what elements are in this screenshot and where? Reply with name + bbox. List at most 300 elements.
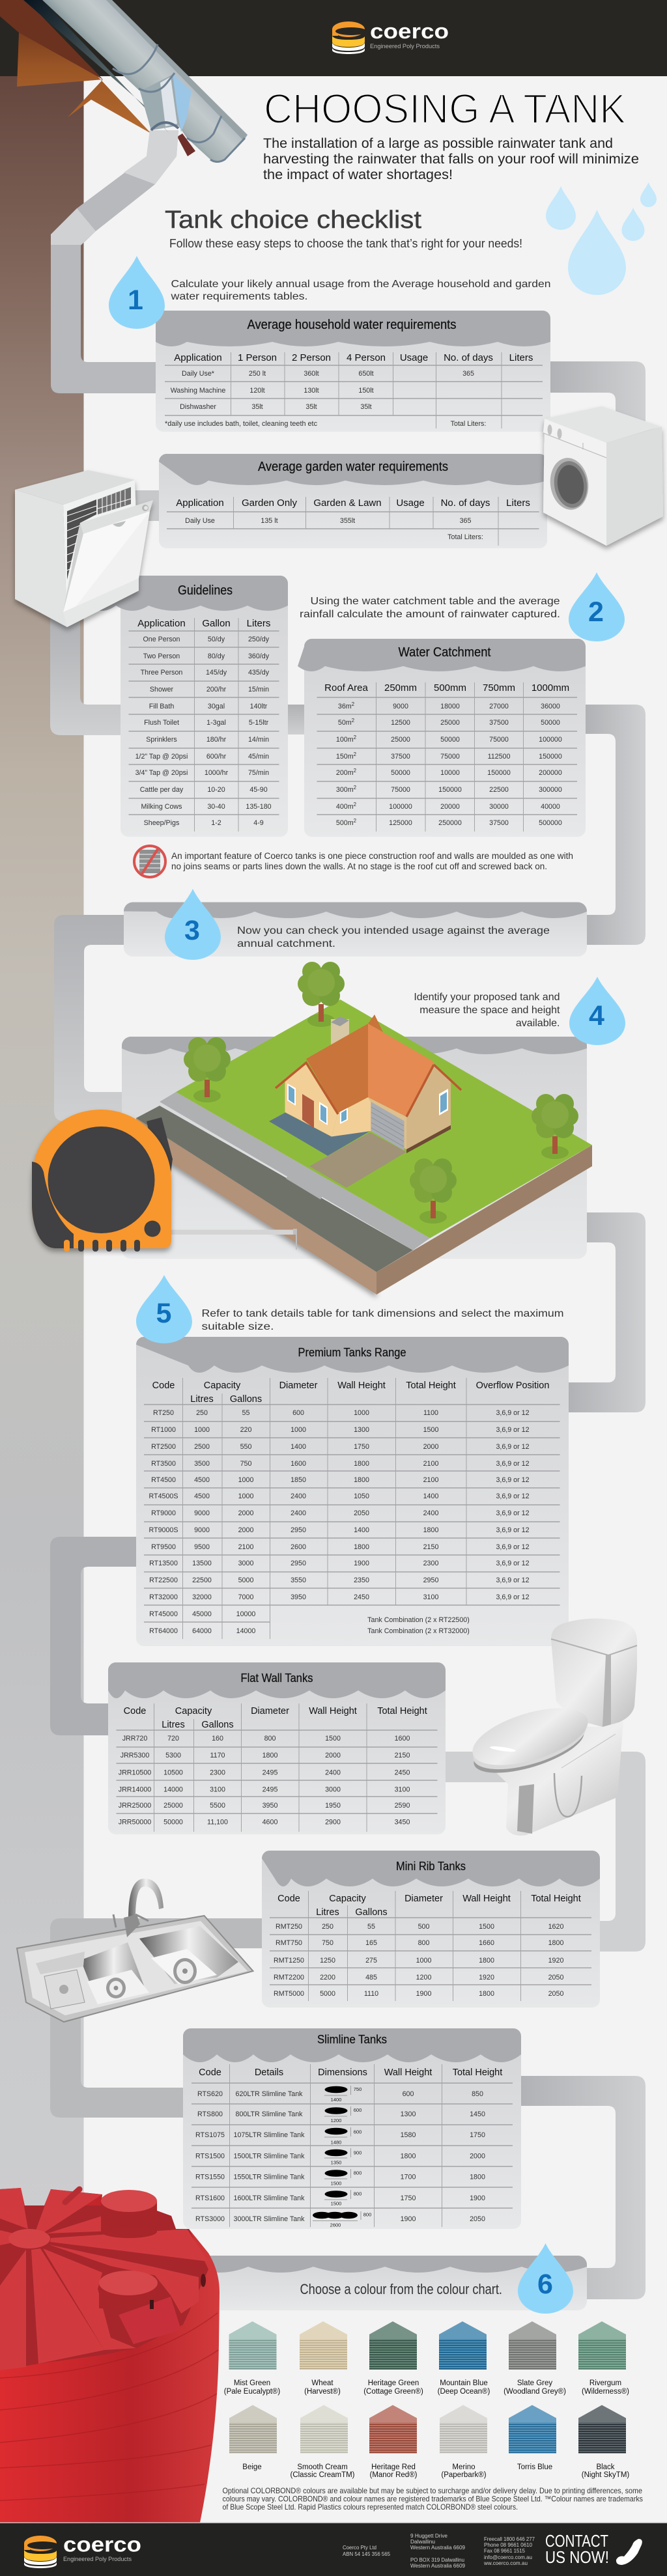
table: premium tanks range: 1000 xyxy=(194,1426,210,1434)
slimline tank footprint diagrams: 1350 xyxy=(331,2159,341,2166)
table: slimline tanks: 850 xyxy=(472,2090,483,2098)
table: average garden water requirements: Garden & Lawn xyxy=(313,497,382,509)
table: premium tanks range: 2350 xyxy=(354,1576,369,1584)
table: premium tanks range: 2450 xyxy=(354,1593,369,1601)
icon: kitchen sink xyxy=(17,1879,253,2022)
table: slimline tanks xyxy=(183,2028,521,2229)
colour chart swatches xyxy=(229,2321,626,2454)
table: guidelines: 140ltr xyxy=(250,703,268,710)
table: premium tanks range: RT9000 xyxy=(151,1509,176,1517)
table: flat wall tanks: 2150 xyxy=(395,1752,410,1759)
table: average garden water requirements xyxy=(159,454,547,548)
table: flat wall tanks: Code xyxy=(124,1706,146,1716)
table: water catchment: 2 xyxy=(352,718,355,723)
table: water catchment: 9000 xyxy=(393,703,408,710)
table: guidelines: 180/hr xyxy=(206,736,227,744)
table: premium tanks range: 3,6,9 or 12 xyxy=(496,1526,530,1534)
table: water catchment: 50m xyxy=(338,719,352,727)
table: guidelines: Sheep/Pigs xyxy=(144,819,179,827)
table: water catchment: 2 xyxy=(354,751,357,757)
table: average garden water requirements: Application xyxy=(176,497,224,509)
colour names: Mist Green xyxy=(234,2379,270,2387)
footer company details: Freecall 1800 646 277 xyxy=(484,2536,535,2542)
contact call to action xyxy=(545,2531,609,2567)
table: premium tanks range: 2100 xyxy=(423,1460,438,1468)
table: water catchment: 400m xyxy=(336,803,354,811)
contact call to action: US NOW! xyxy=(545,2547,609,2567)
table: average household water requirements: 35lt xyxy=(360,403,372,411)
table: flat wall tanks: JRR720 xyxy=(122,1735,147,1743)
table: water catchment: 100000 xyxy=(389,803,412,811)
table: water catchment: 25000 xyxy=(391,736,410,744)
table: guidelines: Two Person xyxy=(143,652,180,660)
table: premium tanks range: 2050 xyxy=(354,1509,369,1517)
panel: step 4 backdrop xyxy=(122,1037,587,1259)
table: water catchment: 37500 xyxy=(489,819,509,827)
table: flat wall tanks: 2900 xyxy=(325,1818,341,1826)
note: one piece construction: An important feature of Coerco tanks is one piece construction roof and walls are moulded as one with xyxy=(171,851,573,861)
table: premium tanks range: 2100 xyxy=(423,1476,438,1484)
table: guidelines: 1000/hr xyxy=(205,769,229,777)
table: premium tanks range: 3,6,9 or 12 xyxy=(496,1576,530,1584)
panel: step 3: 3 xyxy=(184,915,200,946)
step 4 text xyxy=(414,992,560,1029)
icon: washing machine xyxy=(543,406,663,546)
table: premium tanks range: RT64000 xyxy=(149,1627,178,1635)
table: guidelines: 250/dy xyxy=(248,636,270,643)
table: premium tanks range: 3500 xyxy=(194,1460,210,1468)
footer company details: 9 Huggett Drive xyxy=(410,2532,447,2539)
table: mini rib tanks: 500 xyxy=(418,1923,429,1931)
colour names: (Deep Ocean®) xyxy=(438,2388,490,2396)
table: water catchment: 2 xyxy=(354,735,357,740)
footer company details: Western Australia 6609 xyxy=(410,2562,465,2569)
checklist subheading: Follow these easy steps to choose the tank that’s right for your needs! xyxy=(169,237,522,250)
brick wall strip xyxy=(0,0,83,2576)
table: premium tanks range: 1000 xyxy=(238,1492,253,1500)
table: mini rib tanks: RMT750 xyxy=(276,1939,302,1947)
slimline tank footprint diagrams: 1500 xyxy=(331,2201,341,2206)
table: water catchment: 40000 xyxy=(541,803,560,811)
table: water catchment: 300000 xyxy=(539,786,562,794)
table: mini rib tanks: RMT2200 xyxy=(274,1974,304,1981)
table: water catchment: 10000 xyxy=(440,769,460,777)
table: premium tanks range: RT9000S xyxy=(149,1526,178,1534)
note: one piece construction xyxy=(171,851,573,871)
slimline tank footprint diagrams: 1200 xyxy=(331,2118,341,2123)
panel: step 6: Choose a colour from the colour chart. xyxy=(300,2281,502,2297)
table: guidelines: 30-40 xyxy=(207,803,225,811)
table: average garden water requirements: No. of days xyxy=(441,497,490,509)
step 2 text xyxy=(300,596,560,620)
table: premium tanks range: 1850 xyxy=(291,1476,306,1484)
table: mini rib tanks: 1500 xyxy=(479,1923,494,1931)
table: slimline tanks: RTS1600 xyxy=(195,2194,225,2202)
table: water catchment: 200m xyxy=(336,769,354,777)
table: premium tanks range: RT22500 xyxy=(149,1576,178,1584)
table: slimline tanks: RTS1550 xyxy=(195,2174,225,2181)
table: flat wall tanks: Capacity xyxy=(175,1706,212,1716)
table: slimline tanks: 1580 xyxy=(401,2131,416,2139)
table: premium tanks range: 3100 xyxy=(423,1593,438,1601)
table: mini rib tanks: Capacity xyxy=(329,1894,366,1904)
panel: step 3: Now you can check you intended usage against the average xyxy=(237,925,550,936)
icon: toilet xyxy=(466,1618,637,1836)
table: premium tanks range: 5000 xyxy=(238,1576,253,1584)
table: mini rib tanks: 2050 xyxy=(548,1974,563,1981)
table: mini rib tanks: RMT5000 xyxy=(274,1990,304,1998)
table: water catchment: 75000 xyxy=(440,753,460,761)
table: flat wall tanks: 25000 xyxy=(163,1802,183,1810)
table: mini rib tanks: 485 xyxy=(365,1974,377,1981)
table: water catchment: 300m xyxy=(336,786,354,794)
footer logo: Engineered Poly Products xyxy=(63,2556,132,2562)
table: slimline tanks: 1075LTR Slimline Tank xyxy=(234,2131,305,2139)
table: average household water requirements: 150lt xyxy=(358,387,374,395)
table: premium tanks range: 2400 xyxy=(291,1509,306,1517)
table: premium tanks range: 1800 xyxy=(354,1543,369,1551)
slimline tank footprint diagrams xyxy=(313,2086,371,2228)
step 4 text: Identify your proposed tank and xyxy=(414,992,560,1003)
table: guidelines: 15/min xyxy=(248,686,269,693)
table: mini rib tanks xyxy=(262,1851,600,2008)
colour names: Wheat xyxy=(311,2379,334,2387)
colour names: (Pale Eucalypt®) xyxy=(224,2388,280,2396)
table: flat wall tanks: 2495 xyxy=(263,1785,277,1793)
table: slimline tanks: Dimensions xyxy=(318,2067,367,2078)
table: average garden water requirements: Daily Use xyxy=(185,517,215,525)
table: guidelines: 1/2” Tap @ 20psi xyxy=(135,753,188,761)
intro paragraph: harvesting the rainwater that falls on your roof will minimize xyxy=(263,152,639,167)
illustration: red rainwater tank xyxy=(0,2188,220,2523)
table: premium tanks range: 4500 xyxy=(194,1492,210,1500)
step 5 text xyxy=(202,1308,564,1332)
table: flat wall tanks: 800 xyxy=(264,1735,276,1743)
table: water catchment: 150000 xyxy=(539,753,562,761)
table: flat wall tanks: 160 xyxy=(212,1735,223,1743)
colour disclaimer: of Blue Scope Steel Ltd. Rapid Plastics colours represented match COLORBOND® steel colours. xyxy=(223,2502,518,2512)
table: premium tanks range: 2500 xyxy=(194,1443,210,1451)
table: slimline tanks: Code xyxy=(199,2067,221,2078)
table: water catchment: 200000 xyxy=(539,769,562,777)
footer company details: ww.coerco.com.au xyxy=(483,2560,528,2566)
table: slimline tanks: 2000 xyxy=(470,2153,485,2161)
table: premium tanks range: 3,6,9 or 12 xyxy=(496,1460,530,1468)
panel: step 6: 6 xyxy=(537,2269,553,2300)
table: premium tanks range: 2950 xyxy=(291,1560,306,1567)
table: mini rib tanks: Mini Rib Tanks xyxy=(396,1860,466,1873)
table: mini rib tanks: Diameter xyxy=(404,1894,443,1904)
table: premium tanks range: 9000 xyxy=(194,1509,210,1517)
table: average garden water requirements: 355lt xyxy=(340,517,355,525)
tank inlet xyxy=(99,2271,206,2344)
table: flat wall tanks: Diameter xyxy=(251,1706,289,1716)
table: guidelines: 75/min xyxy=(248,769,269,777)
table: flat wall tanks: 720 xyxy=(167,1735,179,1743)
table: water catchment: 50000 xyxy=(391,769,410,777)
table: water catchment: 75000 xyxy=(489,736,509,744)
table: water catchment: Water Catchment xyxy=(399,645,491,660)
table: mini rib tanks: Total Height xyxy=(531,1894,581,1904)
table: premium tanks range: 55 xyxy=(242,1409,249,1417)
table: guidelines: 30gal xyxy=(208,703,225,710)
table: premium tanks range: 2100 xyxy=(238,1543,253,1551)
table: guidelines: Cattle per day xyxy=(140,786,184,794)
table: water catchment: 250000 xyxy=(438,819,462,827)
step 1 text xyxy=(170,279,551,302)
step 2 drop: 2 xyxy=(588,596,604,628)
footer company details: Phone 08 9661 0610 xyxy=(484,2541,532,2548)
table: premium tanks range: 3,6,9 or 12 xyxy=(496,1560,530,1567)
colour disclaimer xyxy=(223,2486,643,2512)
colour names: (Harvest®) xyxy=(304,2388,341,2396)
table: slimline tanks: RTS1075 xyxy=(195,2131,225,2139)
table: mini rib tanks: Gallons xyxy=(355,1907,388,1918)
table: premium tanks range: 2950 xyxy=(423,1576,438,1584)
table: premium tanks range: 7000 xyxy=(238,1593,253,1601)
table: guidelines: 45/min xyxy=(248,753,269,761)
table: mini rib tanks: 1620 xyxy=(548,1923,563,1931)
table: premium tanks range: 220 xyxy=(240,1426,251,1434)
table: guidelines: Guidelines xyxy=(178,583,233,598)
panel: step 3 xyxy=(124,889,587,960)
table: slimline tanks: RTS1500 xyxy=(195,2153,225,2161)
slimline tank footprint diagrams: 600 xyxy=(354,2129,362,2135)
table: premium tanks range: 3,6,9 or 12 xyxy=(496,1443,530,1451)
footer band xyxy=(0,2523,667,2576)
contact call to action: CONTACT xyxy=(545,2531,608,2551)
table: slimline tanks: 1900 xyxy=(470,2194,485,2202)
table: flat wall tanks: 3000 xyxy=(325,1785,341,1793)
table: water catchment: 1000mm xyxy=(532,682,569,693)
table: guidelines xyxy=(88,576,288,837)
table: mini rib tanks: 1900 xyxy=(416,1990,431,1998)
table: premium tanks range: 750 xyxy=(240,1460,251,1468)
table: premium tanks range: 13500 xyxy=(192,1560,212,1567)
step 1 text: Calculate your likely annual usage from the Average household and garden xyxy=(171,279,551,290)
table: flat wall tanks: Wall Height xyxy=(309,1706,357,1716)
table: premium tanks range: 1400 xyxy=(291,1443,306,1451)
table: premium tanks range: 2300 xyxy=(423,1560,438,1567)
table: mini rib tanks: 2200 xyxy=(320,1974,335,1981)
table: mini rib tanks: 165 xyxy=(365,1939,377,1947)
table: mini rib tanks: 2050 xyxy=(548,1990,563,1998)
footer logo: coerco xyxy=(63,2533,141,2556)
table: guidelines: 1-2 xyxy=(211,819,221,827)
table: flat wall tanks: 2495 xyxy=(263,1769,277,1776)
table: average household water requirements: 35lt xyxy=(305,403,317,411)
colour names: (Manor Red®) xyxy=(369,2471,418,2479)
colour names: Torris Blue xyxy=(517,2463,552,2471)
table: flat wall tanks: 3100 xyxy=(210,1785,225,1793)
table: flat wall tanks: Total Height xyxy=(377,1706,427,1716)
table: flat wall tanks: 5500 xyxy=(210,1802,225,1810)
table: slimline tanks: 800LTR Slimline Tank xyxy=(236,2110,303,2118)
table: premium tanks range: Tank Combination (2 x RT32000) xyxy=(367,1627,470,1635)
table: premium tanks range: 1300 xyxy=(354,1426,369,1434)
colour names: (Night SkyTM) xyxy=(582,2471,629,2479)
table: water catchment: 25000 xyxy=(440,719,460,727)
table: mini rib tanks: 800 xyxy=(418,1939,429,1947)
footer company details: ABN 54 145 356 565 xyxy=(343,2551,390,2557)
panel: step 6 xyxy=(189,2243,587,2314)
table: water catchment: 18000 xyxy=(440,703,460,710)
table: guidelines: Shower xyxy=(150,686,174,693)
table: guidelines: Application xyxy=(137,618,186,629)
step 2 drop xyxy=(569,572,625,641)
table: premium tanks range: 1000 xyxy=(238,1476,253,1484)
table: flat wall tanks: JRR5300 xyxy=(121,1752,149,1759)
table: average household water requirements: 120lt xyxy=(249,387,265,395)
table: water catchment: 750mm xyxy=(483,682,515,693)
step 4 drop: 4 xyxy=(589,1000,604,1031)
table: water catchment: 2 xyxy=(352,701,355,707)
table: water catchment: 500mm xyxy=(434,682,466,693)
table: guidelines: Flush Toilet xyxy=(144,719,179,727)
table: flat wall tanks: JRR25000 xyxy=(119,1802,151,1810)
colour names: Merino xyxy=(452,2463,475,2471)
colour names: (Cottage Green®) xyxy=(363,2388,423,2396)
table: premium tanks range: 3,6,9 or 12 xyxy=(496,1409,530,1417)
table: premium tanks range: 2000 xyxy=(238,1509,253,1517)
table: premium tanks range: 1900 xyxy=(354,1560,369,1567)
table: premium tanks range: 1800 xyxy=(354,1460,369,1468)
table: water catchment: 12500 xyxy=(391,719,410,727)
table: flat wall tanks: Gallons xyxy=(201,1720,234,1730)
table: premium tanks range: 2600 xyxy=(291,1543,306,1551)
table: flat wall tanks: 11,100 xyxy=(207,1818,228,1826)
table: premium tanks range: RT1000 xyxy=(151,1426,176,1434)
colour names: Smooth Cream xyxy=(297,2463,348,2471)
table: average garden water requirements: Usage xyxy=(396,497,425,509)
table: slimline tanks: Total Height xyxy=(453,2067,502,2078)
step 2 text: rainfall calculate the amount of rainwater captured. xyxy=(300,609,560,620)
table: average garden water requirements: 365 xyxy=(460,517,471,525)
table: flat wall tanks: 50000 xyxy=(163,1818,183,1826)
patio xyxy=(269,1112,370,1156)
table: guidelines: 50/dy xyxy=(208,636,225,643)
table: premium tanks range: RT45000 xyxy=(149,1610,178,1618)
decorative water drops xyxy=(546,182,657,295)
table: average household water requirements xyxy=(156,311,550,432)
table: slimline tanks: RTS800 xyxy=(197,2110,223,2118)
table: average household water requirements: Daily Use* xyxy=(182,370,214,378)
table: mini rib tanks: 1200 xyxy=(416,1974,431,1981)
table: premium tanks range: 2950 xyxy=(291,1526,306,1534)
table: water catchment: 150000 xyxy=(438,786,462,794)
step 1 drop: 1 xyxy=(128,285,143,316)
table: flat wall tanks: 1600 xyxy=(395,1735,410,1743)
table: premium tanks range: 1800 xyxy=(354,1476,369,1484)
table: flat wall tanks: JRR14000 xyxy=(119,1785,151,1793)
table: premium tanks range: 3950 xyxy=(291,1593,306,1601)
slimline tank footprint diagrams: 2600 xyxy=(330,2222,341,2228)
table: premium tanks range: 550 xyxy=(240,1443,251,1451)
footer company details xyxy=(343,2532,535,2569)
table: flat wall tanks: 10500 xyxy=(163,1769,183,1776)
table: slimline tanks: 1700 xyxy=(401,2174,416,2181)
table: water catchment: 37500 xyxy=(391,753,410,761)
table: flat wall tanks: 2300 xyxy=(210,1769,225,1776)
table: premium tanks range: 3,6,9 or 12 xyxy=(496,1476,530,1484)
table: premium tanks range: 1000 xyxy=(291,1426,306,1434)
driveway xyxy=(309,1132,406,1188)
table: flat wall tanks: 2450 xyxy=(395,1769,410,1776)
table: guidelines: 45-90 xyxy=(249,786,268,794)
table: slimline tanks: Details xyxy=(255,2067,283,2078)
table: premium tanks range: RT3500 xyxy=(151,1460,176,1468)
table: water catchment: 2 xyxy=(354,768,357,774)
table: water catchment: 250mm xyxy=(384,682,417,693)
table: premium tanks range: Premium Tanks Range xyxy=(298,1346,406,1359)
icon: dishwasher xyxy=(15,470,153,627)
slimline tank footprint diagrams: 1400 xyxy=(331,2097,341,2103)
table: guidelines: 1-3gal xyxy=(206,719,226,727)
slimline tank footprint diagrams: 1500 xyxy=(331,2180,341,2187)
step 5 text: suitable size. xyxy=(202,1321,274,1332)
table: premium tanks range: 1800 xyxy=(423,1526,438,1534)
table: average household water requirements: Average household water requirements xyxy=(248,318,456,332)
colour names: Slate Grey xyxy=(517,2379,552,2387)
table: premium tanks range: 250 xyxy=(196,1409,208,1417)
water pipes xyxy=(50,130,646,2299)
table: mini rib tanks: 1920 xyxy=(548,1957,563,1965)
table: slimline tanks: RTS620 xyxy=(197,2090,223,2098)
table: premium tanks range: 600 xyxy=(292,1409,304,1417)
table: premium tanks range: RT2500 xyxy=(151,1443,176,1451)
table: average household water requirements: 130lt xyxy=(304,387,319,395)
table: water catchment: 36m xyxy=(338,703,352,710)
table: water catchment: 37500 xyxy=(489,719,509,727)
table: premium tanks range: RT13500 xyxy=(149,1560,178,1567)
main title: CHOOSING A TANK xyxy=(264,85,626,132)
table: average household water requirements: 1 Person xyxy=(238,352,277,363)
colour names: (Woodland Grey®) xyxy=(504,2388,566,2396)
table: water catchment: 30000 xyxy=(489,803,509,811)
table: premium tanks range: 1500 xyxy=(423,1426,438,1434)
colour names: Heritage Green xyxy=(368,2379,419,2387)
table: guidelines: One Person xyxy=(143,636,180,643)
table: slimline tanks: 1750 xyxy=(470,2131,485,2139)
table: flat wall tanks: 1170 xyxy=(210,1752,225,1759)
house xyxy=(276,1015,461,1153)
table: flat wall tanks: 1500 xyxy=(325,1735,341,1743)
table: flat wall tanks: 3950 xyxy=(263,1802,277,1810)
checklist heading: Tank choice checklist xyxy=(165,206,421,234)
table: water catchment xyxy=(298,639,586,837)
table: guidelines: 10-20 xyxy=(207,786,225,794)
colour names: (Classic CreamTM) xyxy=(290,2471,355,2479)
table: premium tanks range: 1400 xyxy=(354,1526,369,1534)
slimline tank footprint diagrams: 800 xyxy=(354,2170,362,2176)
table: flat wall tanks: 2000 xyxy=(325,1752,341,1759)
table: water catchment: 2 xyxy=(354,785,357,791)
table: slimline tanks: 1300 xyxy=(401,2110,416,2118)
slimline tank footprint diagrams: 1480 xyxy=(331,2140,341,2145)
footer company details: Dalwallinu xyxy=(410,2538,435,2545)
table: slimline tanks: 1800 xyxy=(470,2174,485,2181)
table: mini rib tanks: 1800 xyxy=(479,1957,494,1965)
table: water catchment: 150m xyxy=(336,753,354,761)
table: water catchment: 150000 xyxy=(487,769,511,777)
icon: no cut tank xyxy=(134,846,165,877)
table: guidelines: 5-15ltr xyxy=(249,719,269,727)
header logo: coerco xyxy=(370,20,449,43)
table: flat wall tanks: 14000 xyxy=(163,1785,183,1793)
table: average garden water requirements: Average garden water requirements xyxy=(258,460,448,474)
table: flat wall tanks: 5300 xyxy=(165,1752,181,1759)
table: flat wall tanks: 1800 xyxy=(263,1752,277,1759)
